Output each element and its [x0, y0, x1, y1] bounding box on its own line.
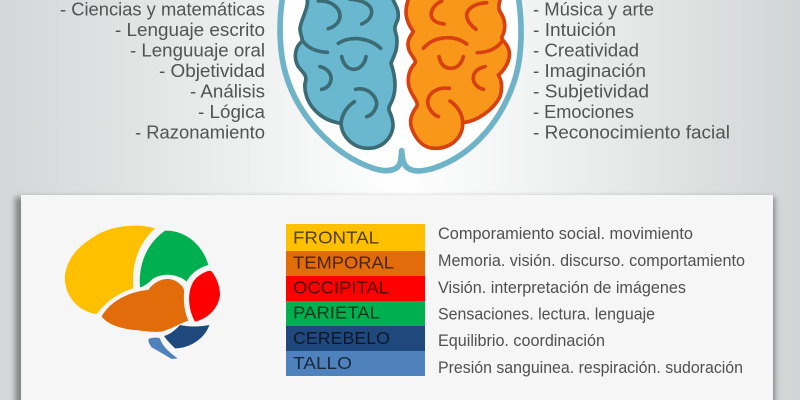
temporal lobe [102, 279, 188, 332]
lobe function descriptions: Sensaciones. lectura. lenguaje [438, 306, 655, 324]
lobe function descriptions: Memoria. visión. discurso. comportamiento [438, 252, 745, 270]
lobe function descriptions: Equilibrio. coordinación [438, 332, 605, 350]
lobe function descriptions: Presión sanguinea. respiración. sudoración [438, 359, 743, 377]
lobe function descriptions [438, 225, 745, 377]
legend: lobes: TEMPORAL [293, 252, 394, 272]
occipital lobe [189, 271, 220, 322]
card shadow [15, 197, 775, 400]
left hemisphere functions list: - Objetividad [159, 60, 265, 81]
right hemisphere functions list: - Subjetividad [533, 80, 649, 102]
frontal lobe [65, 226, 155, 314]
legend: lobes [286, 224, 425, 376]
parietal lobe [140, 231, 208, 287]
cerebellum [164, 325, 209, 348]
legend: lobes: OCCIPITAL [293, 278, 389, 298]
right hemisphere functions list: - Emociones [533, 101, 634, 122]
left hemisphere functions list: - Razonamiento [135, 122, 265, 142]
right hemisphere functions list: - Creatividad [533, 40, 639, 60]
left hemisphere functions list [60, 0, 266, 142]
head outline [280, 0, 521, 171]
legend: lobes: TALLO [293, 353, 352, 373]
orange right lobe [406, 0, 509, 148]
legend: lobes: FRONTAL [293, 228, 379, 248]
left hemisphere functions list: - Lenguaje escrito [115, 19, 265, 40]
panel: brain lobes [21, 195, 773, 400]
left hemisphere functions list: - Lenguuaje oral [130, 40, 265, 60]
lobe function descriptions: Comporamiento social. movimiento [438, 225, 693, 243]
right hemisphere functions list: - Intuición [533, 19, 616, 40]
left hemisphere functions list: - Análisis [190, 80, 265, 102]
brain stem [148, 338, 178, 359]
lobe function descriptions: Visión. interpretación de imágenes [438, 279, 686, 297]
legend: lobes: PARIETAL [293, 302, 380, 322]
blue left lobe [295, 0, 398, 148]
legend: lobes: CEREBELO [293, 328, 390, 348]
left hemisphere functions list: - Lógica [198, 101, 266, 122]
right hemisphere functions list: - Imaginación [533, 60, 646, 81]
icon: two-hemisphere brain [280, 0, 521, 171]
right hemisphere functions list: - Reconocimiento facial [533, 122, 730, 142]
right hemisphere functions list [533, 0, 730, 142]
icon: colored brain lobes [65, 226, 220, 359]
